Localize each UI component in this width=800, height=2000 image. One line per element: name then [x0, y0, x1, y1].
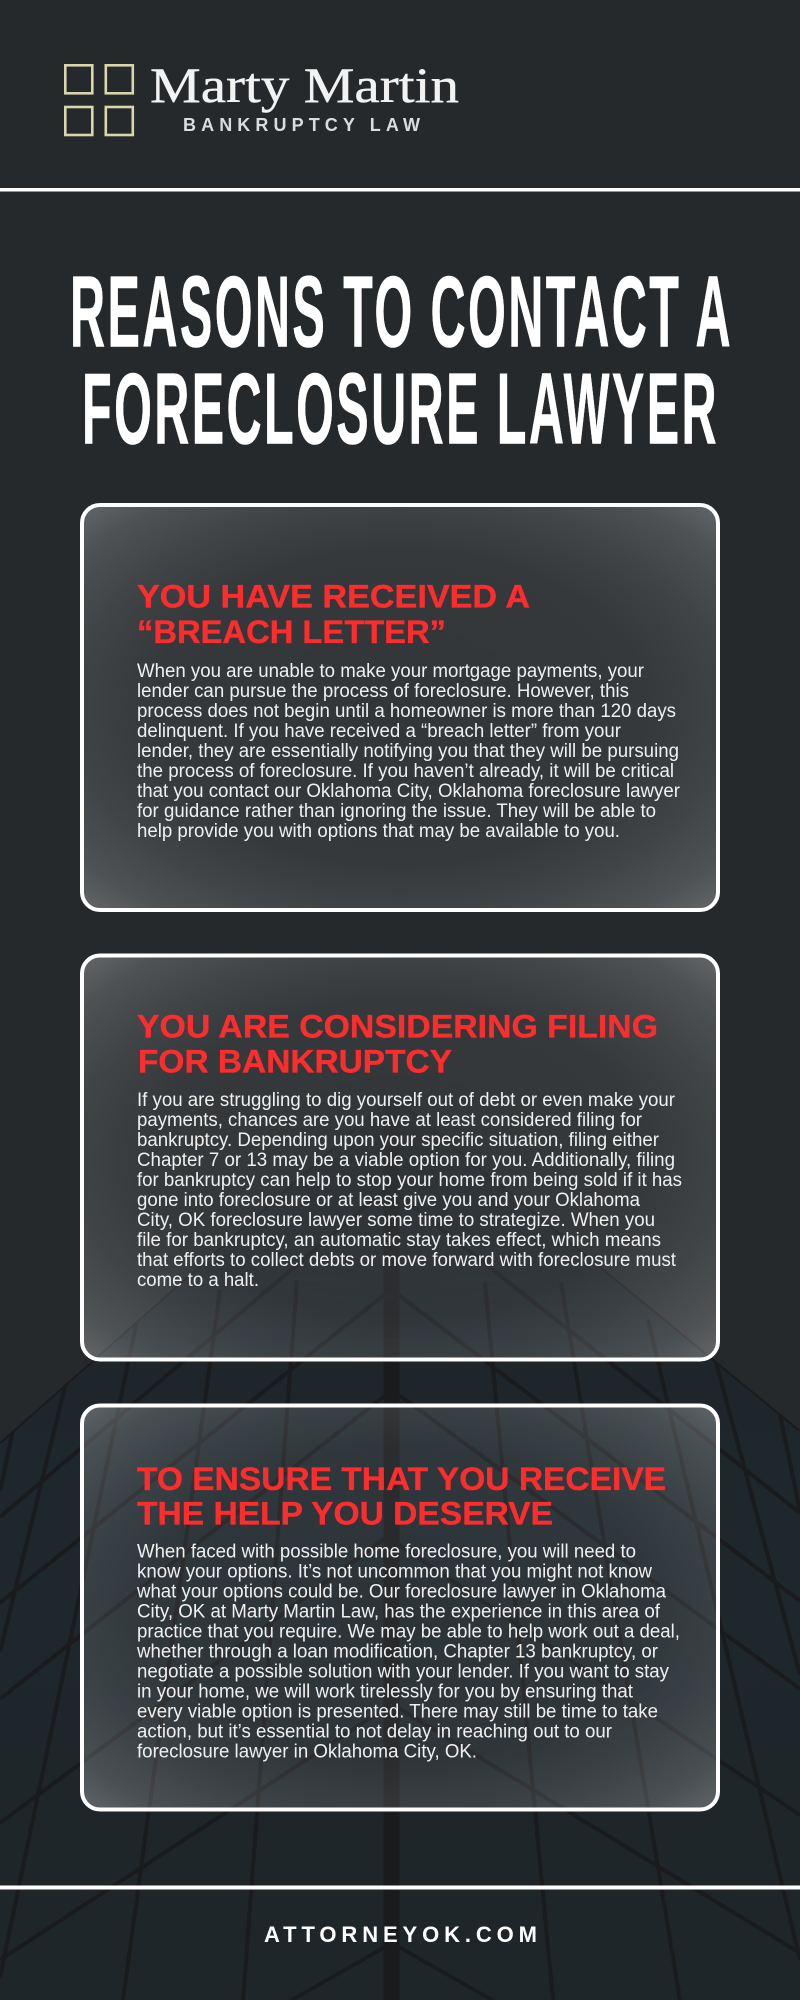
body text: filing for bankruptcy: Chapter 7 or 13 may be a viable option for you. Additionally, filing: [137, 1150, 675, 1171]
body text: help you deserve: every viable option is presented. There may still be time to take: [137, 1702, 658, 1723]
body text: help you deserve: When faced with possible home foreclosure, you will need to: [137, 1542, 636, 1563]
body text: breach letter: the process of foreclosure. If you haven’t already, it will be critical: [137, 761, 674, 782]
body text: help you deserve: foreclosure lawyer in Oklahoma City, OK.: [137, 1742, 477, 1763]
panel: filing for bankruptcy: [82, 956, 718, 1360]
body text: help you deserve: practice that you require. We may be able to help work out a deal,: [137, 1622, 680, 1643]
body text: help you deserve: know your options. It’s not uncommon that you might not know: [137, 1562, 652, 1583]
heading: breach letter: [137, 579, 530, 650]
heading: help you deserve: [137, 1461, 666, 1532]
body text: filing for bankruptcy: If you are struggling to dig yourself out of debt or even make your: [137, 1090, 676, 1111]
body text: breach letter: that you contact our Oklahoma City, Oklahoma foreclosure lawyer: [137, 781, 681, 802]
body text: filing for bankruptcy: gone into foreclosure or at least give you and your Oklahoma: [137, 1190, 640, 1211]
body text: breach letter: for guidance rather than ignoring the issue. They will be able to: [137, 801, 656, 822]
body text: help you deserve: negotiate a possible solution with your lender. If you want to stay: [137, 1662, 669, 1683]
footer website: ATTORNEYOK.COM: [264, 1922, 537, 1947]
panel: breach letter: [82, 505, 718, 910]
heading: filing for bankruptcy: [137, 1009, 658, 1080]
body text: breach letter: [137, 661, 681, 842]
body text: help you deserve: City, OK at Marty Martin Law, has the experience in this area of: [137, 1602, 661, 1623]
body text: help you deserve: what your options could be. Our foreclosure lawyer in Oklahoma: [136, 1582, 666, 1603]
body text: filing for bankruptcy: for bankruptcy can help to stop your home from being sold if it has: [137, 1170, 682, 1191]
body text: filing for bankruptcy: payments, chances are you have at least considered filing for: [137, 1110, 643, 1131]
body text: help you deserve: [136, 1542, 680, 1763]
body text: filing for bankruptcy: that efforts to collect debts or move forward with foreclosure must: [137, 1250, 677, 1271]
logo wordmark: Marty Martin: [150, 57, 459, 113]
body text: breach letter: help provide you with options that may be available to you.: [137, 821, 620, 842]
heading: filing for bankruptcy: FOR BANKRUPTCY: [138, 1044, 452, 1080]
header divider line: [0, 188, 800, 192]
body text: breach letter: process does not begin until a homeowner is more than 120 days: [137, 701, 676, 722]
logo tagline: BANKRUPTCY LAW: [183, 115, 420, 135]
body text: help you deserve: action, but it’s essential to not delay in reaching out to our: [137, 1722, 613, 1743]
body text: breach letter: lender, they are essentially notifying you that they will be pursuing: [137, 741, 679, 762]
header logo: [65, 57, 459, 135]
heading: breach letter: YOU HAVE RECEIVED A: [137, 579, 530, 615]
body text: help you deserve: whether through a loan modification, Chapter 13 bankruptcy, or: [136, 1642, 659, 1663]
body text: filing for bankruptcy: bankruptcy. Depending upon your specific situation, filing either: [137, 1130, 660, 1151]
body text: help you deserve: in your home, we will work tirelessly for you by ensuring that: [137, 1682, 634, 1703]
body text: filing for bankruptcy: file for bankruptcy, an automatic stay takes effect, which means: [137, 1230, 661, 1251]
title: [70, 255, 733, 466]
heading: breach letter: “BREACH LETTER”: [137, 614, 446, 650]
body text: filing for bankruptcy: City, OK foreclosure lawyer some time to strategize. When you: [137, 1210, 655, 1231]
background: building photo with grid lines: [0, 1090, 800, 2000]
heading: help you deserve: TO ENSURE THAT YOU RECEIVE: [137, 1461, 666, 1497]
icon: four square logo mark: [65, 65, 133, 135]
body text: filing for bankruptcy: come to a halt.: [137, 1270, 259, 1291]
heading: filing for bankruptcy: YOU ARE CONSIDERING FILING: [137, 1009, 658, 1045]
body text: breach letter: lender can pursue the process of foreclosure. However, this: [137, 681, 629, 702]
body text: breach letter: delinquent. If you have received a “breach letter” from your: [137, 721, 622, 742]
heading: help you deserve: THE HELP YOU DESERVE: [137, 1496, 553, 1532]
body text: filing for bankruptcy: [137, 1090, 682, 1291]
panel: help you deserve: [82, 1406, 718, 1810]
body text: breach letter: When you are unable to make your mortgage payments, your: [137, 661, 645, 682]
footer divider line: [0, 1886, 800, 1890]
